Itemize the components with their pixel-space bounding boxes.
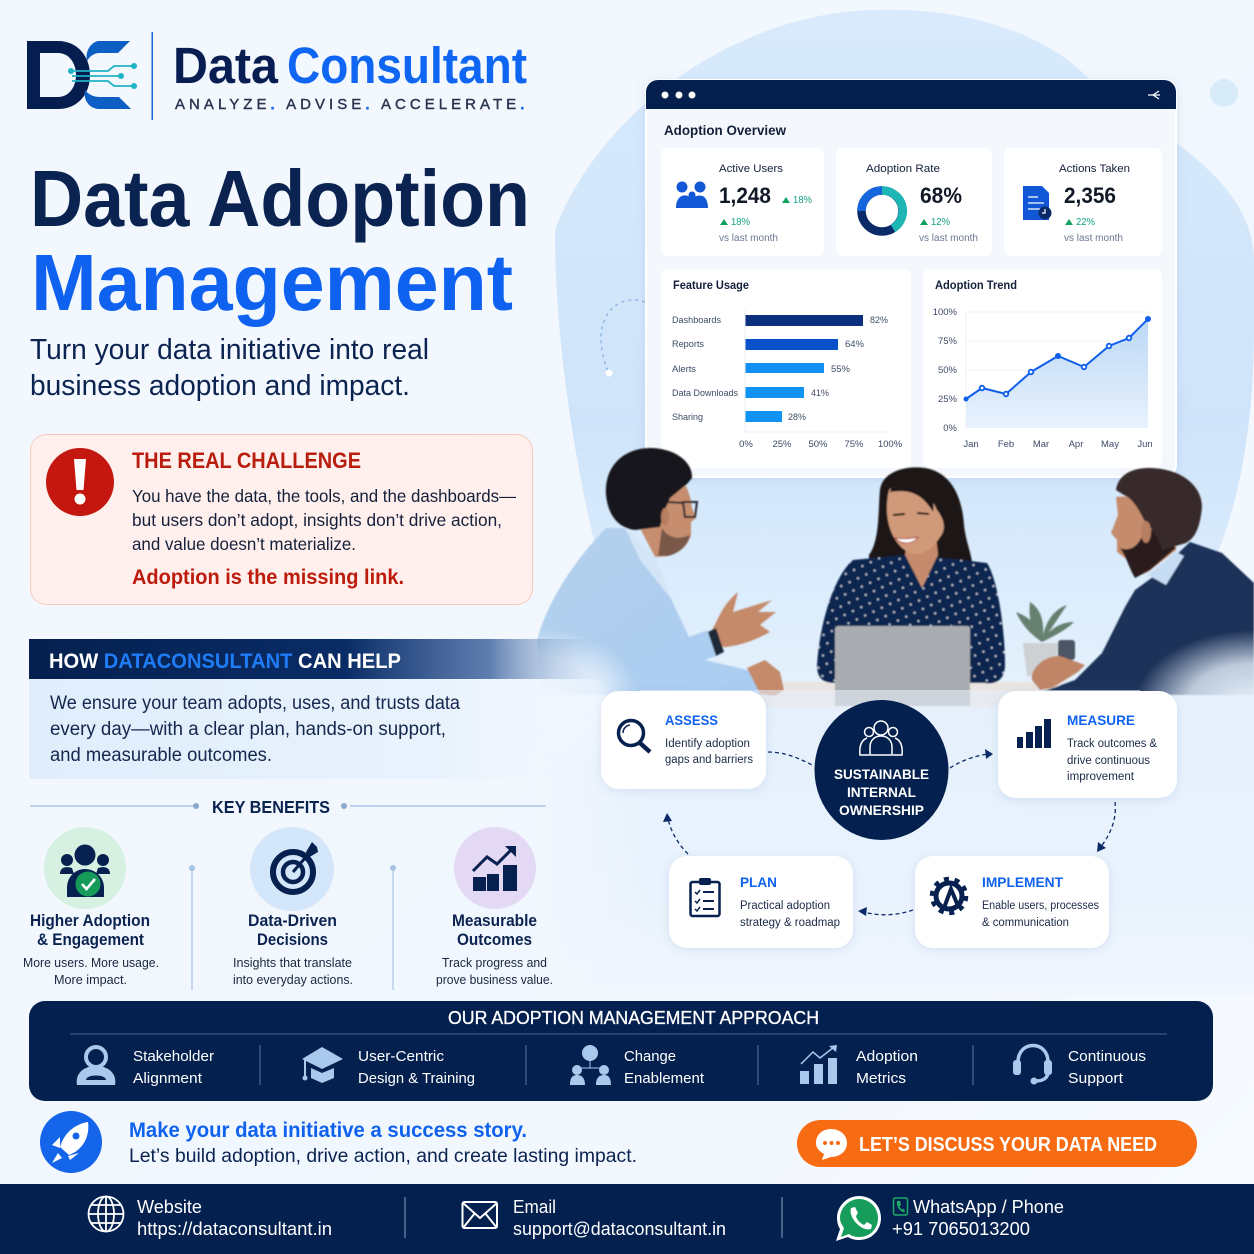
approach: continuous support: Continuous bbox=[1068, 1048, 1146, 1065]
approach: change enablement: Enablement bbox=[624, 1070, 705, 1087]
line chart: adoption trend: Jan bbox=[963, 439, 979, 450]
benefit: data-driven decisions: Data-Driven bbox=[248, 912, 337, 930]
step: plan: PLAN bbox=[740, 874, 777, 890]
kpi card: adoption rate bbox=[836, 148, 992, 256]
icon: alert bbox=[46, 448, 114, 516]
challenge heading: THE REAL CHALLENGE bbox=[132, 448, 361, 473]
approach: adoption metrics: Metrics bbox=[856, 1070, 906, 1087]
approach: adoption metrics bbox=[800, 1045, 918, 1087]
contact: email: Email bbox=[513, 1197, 556, 1217]
challenge text: You have the data, the tools, and the dashboards— bbox=[132, 486, 516, 506]
hub: sustainable internal ownership: INTERNAL bbox=[847, 784, 916, 800]
table bbox=[760, 682, 1060, 706]
bar chart: feature usage bbox=[661, 269, 911, 468]
benefit: measurable outcomes: Track progress and bbox=[442, 955, 547, 970]
bar chart: feature usage: 55% bbox=[831, 364, 851, 375]
footer bbox=[0, 1184, 1254, 1254]
step: implement: & communication bbox=[982, 917, 1069, 929]
line chart: adoption trend: 0% bbox=[943, 423, 958, 434]
line chart: adoption trend: 25% bbox=[938, 394, 958, 405]
benefit: higher adoption bbox=[23, 827, 159, 987]
background blob bbox=[555, 10, 1254, 700]
benefit: measurable outcomes: Measurable bbox=[452, 912, 537, 930]
cta heading: Make your data initiative a success story. bbox=[129, 1119, 527, 1142]
subtitle: Turn your data initiative into real bbox=[30, 334, 429, 366]
help text bbox=[50, 693, 460, 766]
cta button: LET’S DISCUSS YOUR DATA NEED bbox=[859, 1134, 1157, 1156]
subtitle bbox=[30, 334, 429, 402]
approach: stakeholder alignment: Alignment bbox=[133, 1070, 203, 1087]
contact: email: support@dataconsultant.in bbox=[513, 1219, 726, 1239]
step: measure: drive continuous bbox=[1067, 755, 1150, 767]
person: man right bbox=[1032, 468, 1254, 695]
key benefits heading: KEY BENEFITS bbox=[212, 797, 330, 817]
logo bbox=[27, 32, 528, 120]
bar chart: feature usage: Sharing bbox=[672, 412, 703, 423]
step: assess: ASSESS bbox=[665, 712, 718, 728]
tagline: ANALYZE. ADVISE. ACCELERATE. bbox=[175, 96, 528, 113]
icon: target bbox=[250, 827, 334, 911]
bar chart: feature usage: 0% bbox=[739, 439, 753, 450]
approach: user-centric design: Design & Training bbox=[358, 1070, 475, 1087]
icon: growth chart bbox=[454, 827, 536, 909]
icon: clipboard bbox=[690, 878, 720, 916]
icon: document bbox=[1023, 186, 1052, 220]
kpi card: adoption rate: 68% bbox=[920, 183, 962, 208]
icon: users bbox=[676, 182, 708, 208]
benefit: measurable outcomes bbox=[436, 827, 553, 987]
step: measure bbox=[998, 691, 1177, 798]
bar chart: feature usage: 25% bbox=[772, 439, 792, 450]
kpi card: active users: vs last month bbox=[719, 233, 778, 244]
step: implement bbox=[915, 856, 1109, 948]
contact: email bbox=[462, 1197, 726, 1239]
line chart: adoption trend bbox=[923, 269, 1162, 468]
step: assess bbox=[601, 691, 766, 789]
benefit dividers bbox=[189, 865, 396, 990]
bar chart: feature usage: Alerts bbox=[672, 364, 696, 375]
panel: the real challenge bbox=[30, 434, 532, 604]
hub: sustainable internal ownership: OWNERSHIP bbox=[839, 802, 924, 818]
icon: magnifier bbox=[618, 720, 650, 752]
icon: bars bbox=[1017, 719, 1051, 748]
bar chart: feature usage: Reports bbox=[672, 339, 704, 350]
photo fade right bbox=[1134, 630, 1254, 780]
step: plan bbox=[669, 856, 853, 948]
panel: how dataconsultant can help bbox=[29, 639, 604, 779]
cycle diagram bbox=[601, 691, 1177, 948]
icon: engaged users bbox=[44, 827, 126, 909]
brand name: Data bbox=[173, 37, 279, 94]
contact: whatsapp: WhatsApp / Phone bbox=[913, 1197, 1064, 1217]
bar chart: feature usage: Dashboards bbox=[672, 315, 721, 326]
decorative circle bbox=[1210, 79, 1238, 107]
approach: user-centric design bbox=[302, 1047, 475, 1087]
laptop bbox=[835, 626, 970, 706]
subtitle: business adoption and impact. bbox=[30, 370, 410, 402]
icon: team bbox=[860, 721, 902, 755]
icon: rocket bbox=[40, 1111, 102, 1173]
photo fade left bbox=[440, 628, 640, 772]
line chart: adoption trend: May bbox=[1101, 439, 1119, 450]
help heading: HOW DATACONSULTANT CAN HELP bbox=[49, 650, 401, 673]
bar chart: feature usage: 41% bbox=[811, 388, 830, 399]
hub: sustainable internal ownership bbox=[814, 700, 948, 840]
icon: gear bbox=[932, 879, 966, 913]
benefit: data-driven decisions: Decisions bbox=[257, 931, 328, 949]
icon: phone badge bbox=[894, 1198, 908, 1215]
step: assess: Identify adoption bbox=[665, 738, 750, 750]
approach: stakeholder alignment bbox=[77, 1047, 214, 1087]
approach: change enablement bbox=[570, 1045, 705, 1087]
kpi card: actions taken bbox=[1004, 148, 1162, 256]
line chart: adoption trend: Feb bbox=[998, 439, 1014, 450]
cta button bbox=[797, 1120, 1197, 1167]
meeting photo illustration bbox=[440, 448, 1254, 780]
logo divider bbox=[152, 32, 153, 120]
title: Management bbox=[31, 238, 513, 327]
window title bar bbox=[646, 80, 1176, 109]
line chart: adoption trend: Mar bbox=[1033, 439, 1049, 450]
benefit: measurable outcomes: Outcomes bbox=[457, 931, 532, 949]
line chart: adoption trend: Adoption Trend bbox=[935, 280, 1017, 292]
kpi card: active users: Active Users bbox=[719, 163, 784, 175]
kpi card: actions taken: 2,356 bbox=[1064, 183, 1116, 208]
bar chart: feature usage: 64% bbox=[845, 339, 865, 350]
kpi card: actions taken: vs last month bbox=[1064, 233, 1123, 244]
lower right background wash bbox=[540, 695, 1254, 995]
benefit: measurable outcomes: prove business value. bbox=[436, 972, 553, 987]
kpi card: adoption rate: Adoption Rate bbox=[866, 163, 940, 175]
logo mark bbox=[27, 41, 137, 109]
step: plan: strategy & roadmap bbox=[740, 917, 840, 929]
donut chart bbox=[862, 190, 903, 232]
step: implement: IMPLEMENT bbox=[982, 874, 1063, 890]
key benefits heading bbox=[30, 797, 546, 817]
benefit: data-driven decisions: Insights that translate bbox=[233, 955, 352, 970]
kpi card: active users: 18% bbox=[731, 217, 750, 228]
dashboard heading: Adoption Overview bbox=[664, 123, 786, 138]
help text: every day—with a clear plan, hands-on support, bbox=[50, 719, 446, 740]
bar chart: feature usage: 28% bbox=[788, 412, 807, 423]
bar chart: feature usage: Feature Usage bbox=[673, 280, 749, 292]
cta text: Let’s build adoption, drive action, and create lasting impact. bbox=[129, 1146, 637, 1167]
challenge conclusion: Adoption is the missing link. bbox=[132, 566, 404, 589]
kpi card: adoption rate: 12% bbox=[931, 217, 950, 228]
dashboard window bbox=[646, 80, 1176, 477]
table surface fade bbox=[640, 690, 1140, 710]
help text: We ensure your team adopts, uses, and trusts data bbox=[50, 693, 460, 714]
bar chart: feature usage: Data Downloads bbox=[672, 388, 738, 399]
line chart: adoption trend: 75% bbox=[938, 336, 958, 347]
call to action bbox=[40, 1111, 1197, 1173]
line chart: adoption trend: Apr bbox=[1069, 439, 1083, 450]
step: plan: Practical adoption bbox=[740, 900, 830, 912]
kpi card: adoption rate: vs last month bbox=[919, 233, 978, 244]
title: Data Adoption bbox=[30, 154, 530, 243]
step: implement: Enable users, processes bbox=[982, 900, 1099, 912]
contact: website bbox=[88, 1196, 332, 1239]
step: measure: improvement bbox=[1067, 771, 1135, 783]
brand name: Consultant bbox=[287, 37, 527, 94]
approach: continuous support bbox=[1013, 1046, 1146, 1087]
help panel body bbox=[29, 679, 564, 779]
approach: continuous support: Support bbox=[1068, 1070, 1124, 1087]
challenge text: and value doesn’t materialize. bbox=[132, 534, 356, 554]
title bbox=[30, 154, 530, 327]
person: woman bbox=[817, 467, 1005, 683]
step: assess: gaps and barriers bbox=[665, 754, 753, 766]
line chart: adoption trend: 100% bbox=[933, 307, 958, 318]
lower wash left fade bbox=[540, 695, 650, 995]
approach: adoption metrics: Adoption bbox=[856, 1048, 918, 1065]
icon: envelope bbox=[462, 1202, 497, 1228]
kpi card: active users: 18% bbox=[793, 195, 812, 206]
benefit: higher adoption: & Engagement bbox=[37, 931, 144, 949]
person: man left bbox=[537, 448, 784, 696]
arrow heads bbox=[663, 749, 1106, 916]
challenge text bbox=[132, 486, 516, 554]
bar chart: feature usage: 75% bbox=[844, 439, 864, 450]
panel: our adoption management approach bbox=[29, 1001, 1213, 1101]
approach: stakeholder alignment: Stakeholder bbox=[133, 1048, 214, 1065]
bar chart: feature usage: 100% bbox=[878, 439, 903, 450]
approach heading: OUR ADOPTION MANAGEMENT APPROACH bbox=[448, 1008, 819, 1028]
benefit: higher adoption: More users. More usage. bbox=[23, 955, 159, 970]
decorative dotted arc bbox=[601, 300, 645, 376]
benefit: data-driven decisions: into everyday actions. bbox=[233, 972, 353, 987]
icon: globe bbox=[88, 1196, 124, 1232]
hub: sustainable internal ownership: SUSTAINABLE bbox=[834, 766, 929, 782]
contact: whatsapp: +91 7065013200 bbox=[892, 1219, 1030, 1239]
line chart: adoption trend: 50% bbox=[938, 365, 958, 376]
arrows between steps bbox=[668, 752, 1115, 915]
bar chart: feature usage: 82% bbox=[870, 315, 889, 326]
kpi card: active users bbox=[661, 148, 824, 256]
contact: website: Website bbox=[137, 1197, 202, 1217]
bar chart: feature usage: 50% bbox=[808, 439, 828, 450]
plant bbox=[1016, 602, 1075, 676]
contact: website: https://dataconsultant.in bbox=[137, 1219, 332, 1239]
contact: whatsapp bbox=[836, 1196, 1064, 1241]
step: measure: Track outcomes & bbox=[1067, 738, 1157, 750]
line chart: adoption trend: Jun bbox=[1137, 439, 1153, 450]
benefit: higher adoption: Higher Adoption bbox=[30, 912, 150, 930]
kpi card: actions taken: Actions Taken bbox=[1059, 163, 1130, 175]
approach: change enablement: Change bbox=[624, 1048, 676, 1065]
help text: and measurable outcomes. bbox=[50, 745, 272, 766]
benefit: higher adoption: More impact. bbox=[54, 972, 127, 987]
kpi card: actions taken: 22% bbox=[1076, 217, 1095, 228]
approach: user-centric design: User-Centric bbox=[358, 1048, 445, 1065]
challenge text: but users don’t adopt, insights don’t drive action, bbox=[132, 510, 502, 530]
kpi card: active users: 1,248 bbox=[719, 183, 771, 208]
benefit: data-driven decisions bbox=[233, 827, 353, 987]
step: measure: MEASURE bbox=[1067, 712, 1135, 728]
help banner bbox=[29, 639, 604, 679]
icon: whatsapp bbox=[836, 1196, 881, 1241]
